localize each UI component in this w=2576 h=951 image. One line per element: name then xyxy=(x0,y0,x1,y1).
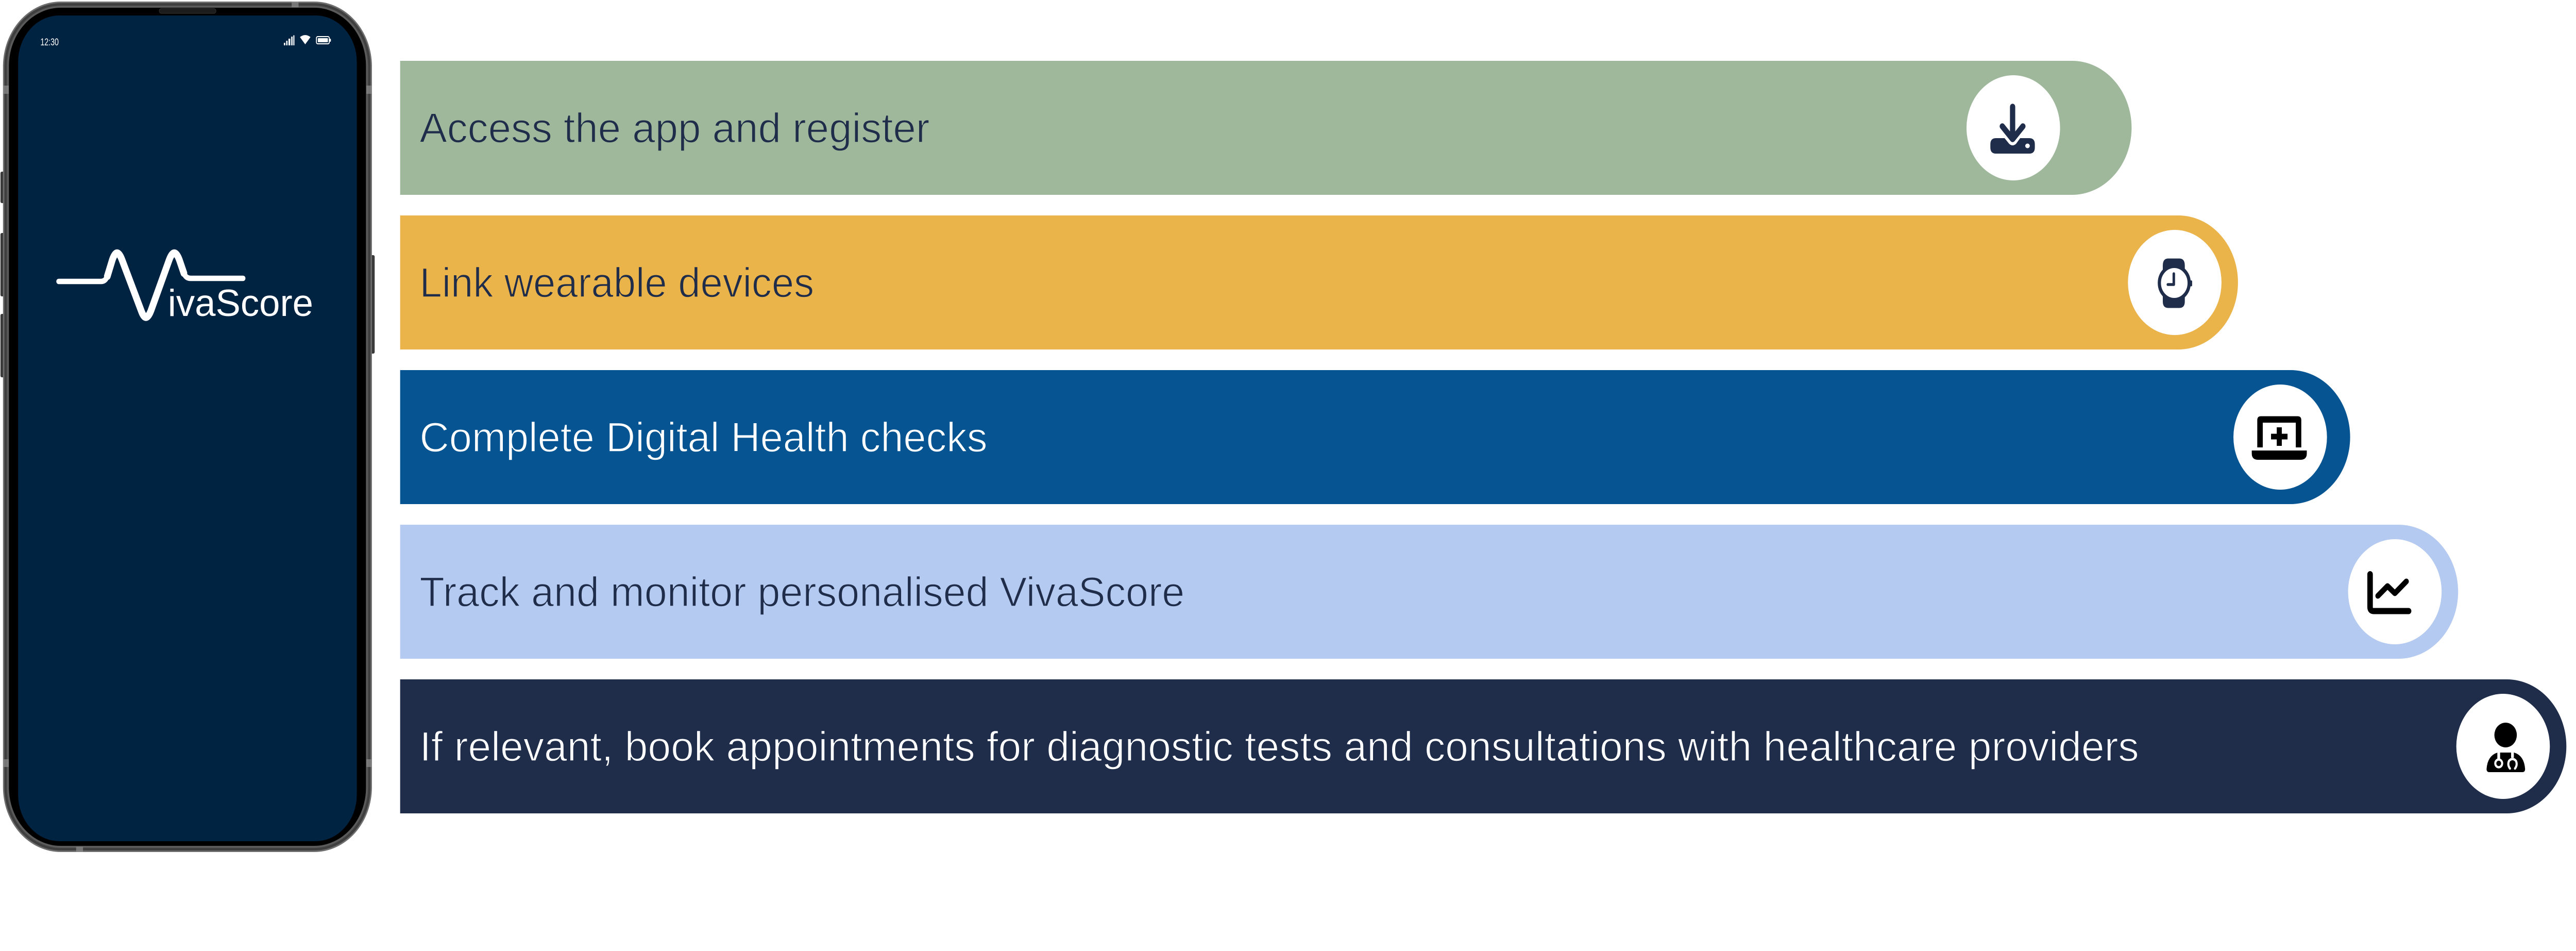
status time: 12:30 xyxy=(40,37,59,47)
phone screen xyxy=(18,15,357,841)
bar xyxy=(400,215,2238,349)
label: If relevant, book appointments for diagnostic tests and consultations with healthcare providers xyxy=(419,724,2139,770)
icon: download xyxy=(1990,107,2035,154)
speaker xyxy=(159,8,216,13)
icon circle xyxy=(2456,694,2550,799)
icon circle xyxy=(1967,75,2060,180)
label: Access the app and register xyxy=(419,105,929,152)
icon: laptop with plus xyxy=(2252,416,2307,460)
logo pulse line xyxy=(59,253,243,318)
logo wordmark: ivaScore xyxy=(168,281,313,324)
status icons xyxy=(284,35,331,45)
VivaScore logo xyxy=(59,253,313,324)
bar xyxy=(400,370,2350,504)
icon circle xyxy=(2128,230,2222,335)
step 4: track VivaScore xyxy=(400,525,2458,659)
icon: watch xyxy=(2159,259,2192,308)
bar xyxy=(400,525,2458,659)
step 2: link wearables xyxy=(400,215,2238,349)
step 3: digital health checks xyxy=(400,370,2350,504)
phone body frame xyxy=(3,2,372,852)
label: Complete Digital Health checks xyxy=(419,414,988,461)
side buttons xyxy=(1,172,375,377)
bar xyxy=(400,679,2566,813)
icon circle xyxy=(2348,539,2442,644)
icon: line chart xyxy=(2370,574,2409,611)
icon circle xyxy=(2233,385,2327,490)
label: Link wearable devices xyxy=(419,260,814,306)
phone mockup xyxy=(1,2,375,852)
label: Track and monitor personalised VivaScore xyxy=(419,569,1184,615)
step 1: access the app xyxy=(400,61,2131,195)
step 5: book appointments xyxy=(400,679,2566,813)
bar xyxy=(400,61,2131,195)
icon: doctor xyxy=(2486,723,2525,772)
